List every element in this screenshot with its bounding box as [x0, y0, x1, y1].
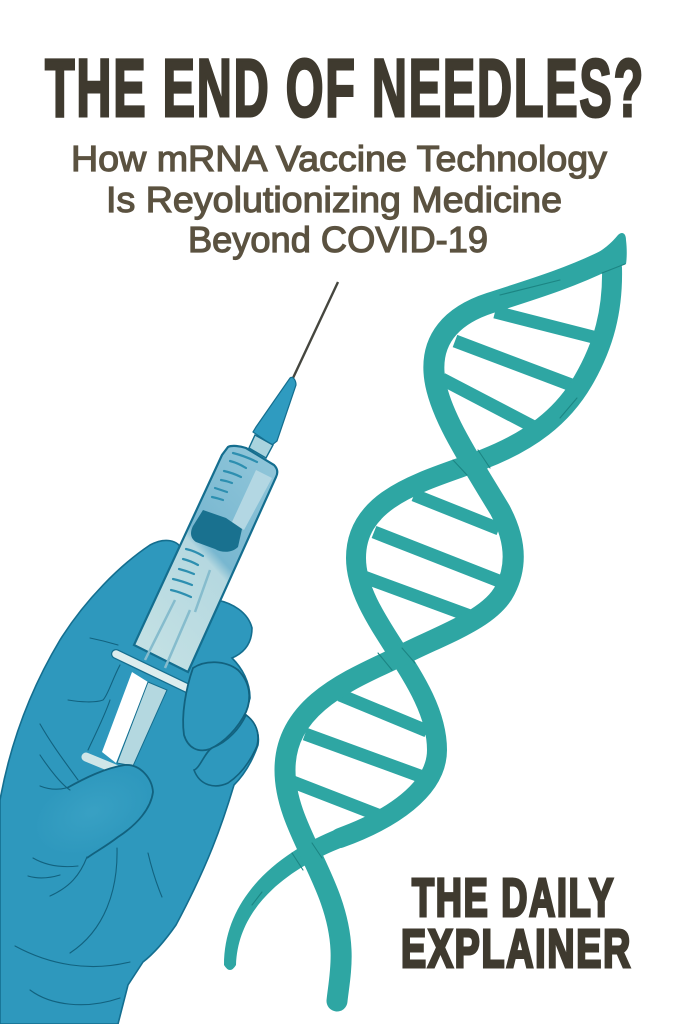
subtitle: How mRNA Vaccine Technology: [71, 138, 607, 179]
graduations: [171, 453, 257, 597]
hand palm and fingers behind syringe: [0, 540, 258, 1024]
thumb highlight: [20, 751, 164, 873]
upper flange: [116, 654, 189, 689]
subtitle: Beyond COVID-19: [188, 219, 488, 260]
DNA strand two: [285, 260, 606, 1001]
subtitle: Is Reyolutionizing Medicine: [106, 179, 562, 220]
plunger rod: [117, 682, 167, 766]
fluid highlights: [232, 470, 272, 530]
streaks on lower barrel: [145, 570, 210, 668]
thumb base fill: [40, 766, 154, 868]
DNA seams: [252, 264, 625, 905]
upper flange face: [116, 654, 189, 689]
ring fingertip: [194, 715, 258, 786]
syringe: [86, 282, 338, 771]
needle hub: [253, 377, 296, 445]
barrel: [134, 446, 277, 672]
DNA strand one: [340, 268, 612, 838]
subtitle: [71, 138, 607, 260]
hand creases: [15, 638, 162, 1005]
plunger piston: [191, 510, 242, 552]
DNA strand one tail: [224, 829, 343, 970]
DNA rungs: [293, 312, 597, 815]
gap between syringe and palm: [102, 672, 148, 763]
DNA top tip: [590, 233, 627, 274]
illustration: DNA double helix: [224, 233, 627, 1001]
syringe neck: [249, 435, 273, 458]
thumb outline: [67, 765, 153, 858]
lower flange: [86, 757, 120, 771]
needle: [293, 282, 338, 378]
publisher name: [401, 868, 632, 979]
middle fingertip: [183, 662, 249, 750]
illustration: gloved hand holding syringe: [0, 282, 338, 1024]
